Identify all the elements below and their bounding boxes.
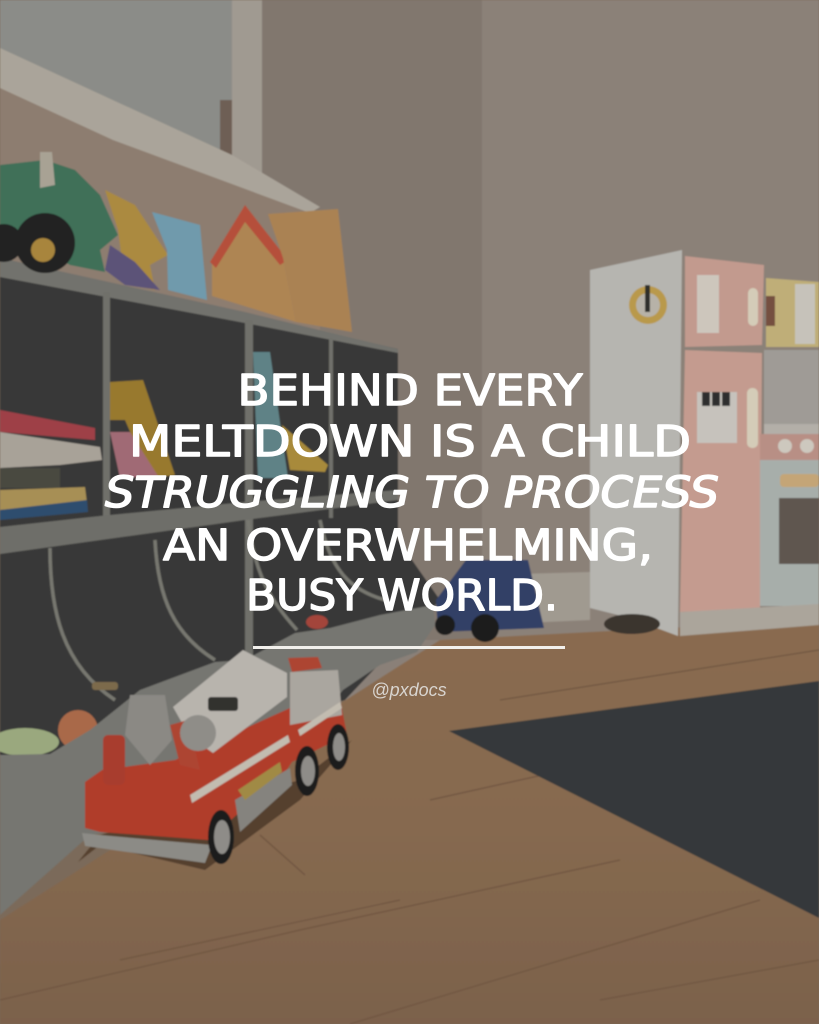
toy shelf: [0, 258, 440, 915]
blue toy truck: [435, 560, 544, 642]
rug: [449, 681, 819, 918]
headline: STRUGGLING TO PROCESS: [105, 468, 719, 518]
headline: MELTDOWN IS A CHILD: [129, 417, 691, 467]
books on shelf: [0, 352, 328, 520]
headline: AN OVERWHELMING,: [163, 521, 653, 571]
red fire truck: [78, 650, 352, 870]
headline: BUSY WORLD.: [246, 571, 558, 621]
background: wall: [0, 0, 819, 700]
divider line: [253, 646, 565, 649]
toys on top of shelf: [0, 152, 352, 332]
play kitchen: [590, 250, 819, 636]
floor: [0, 620, 819, 1024]
handle: @pxdocs: [371, 680, 447, 700]
headline: [105, 366, 719, 621]
headline: BEHIND EVERY: [238, 366, 583, 416]
